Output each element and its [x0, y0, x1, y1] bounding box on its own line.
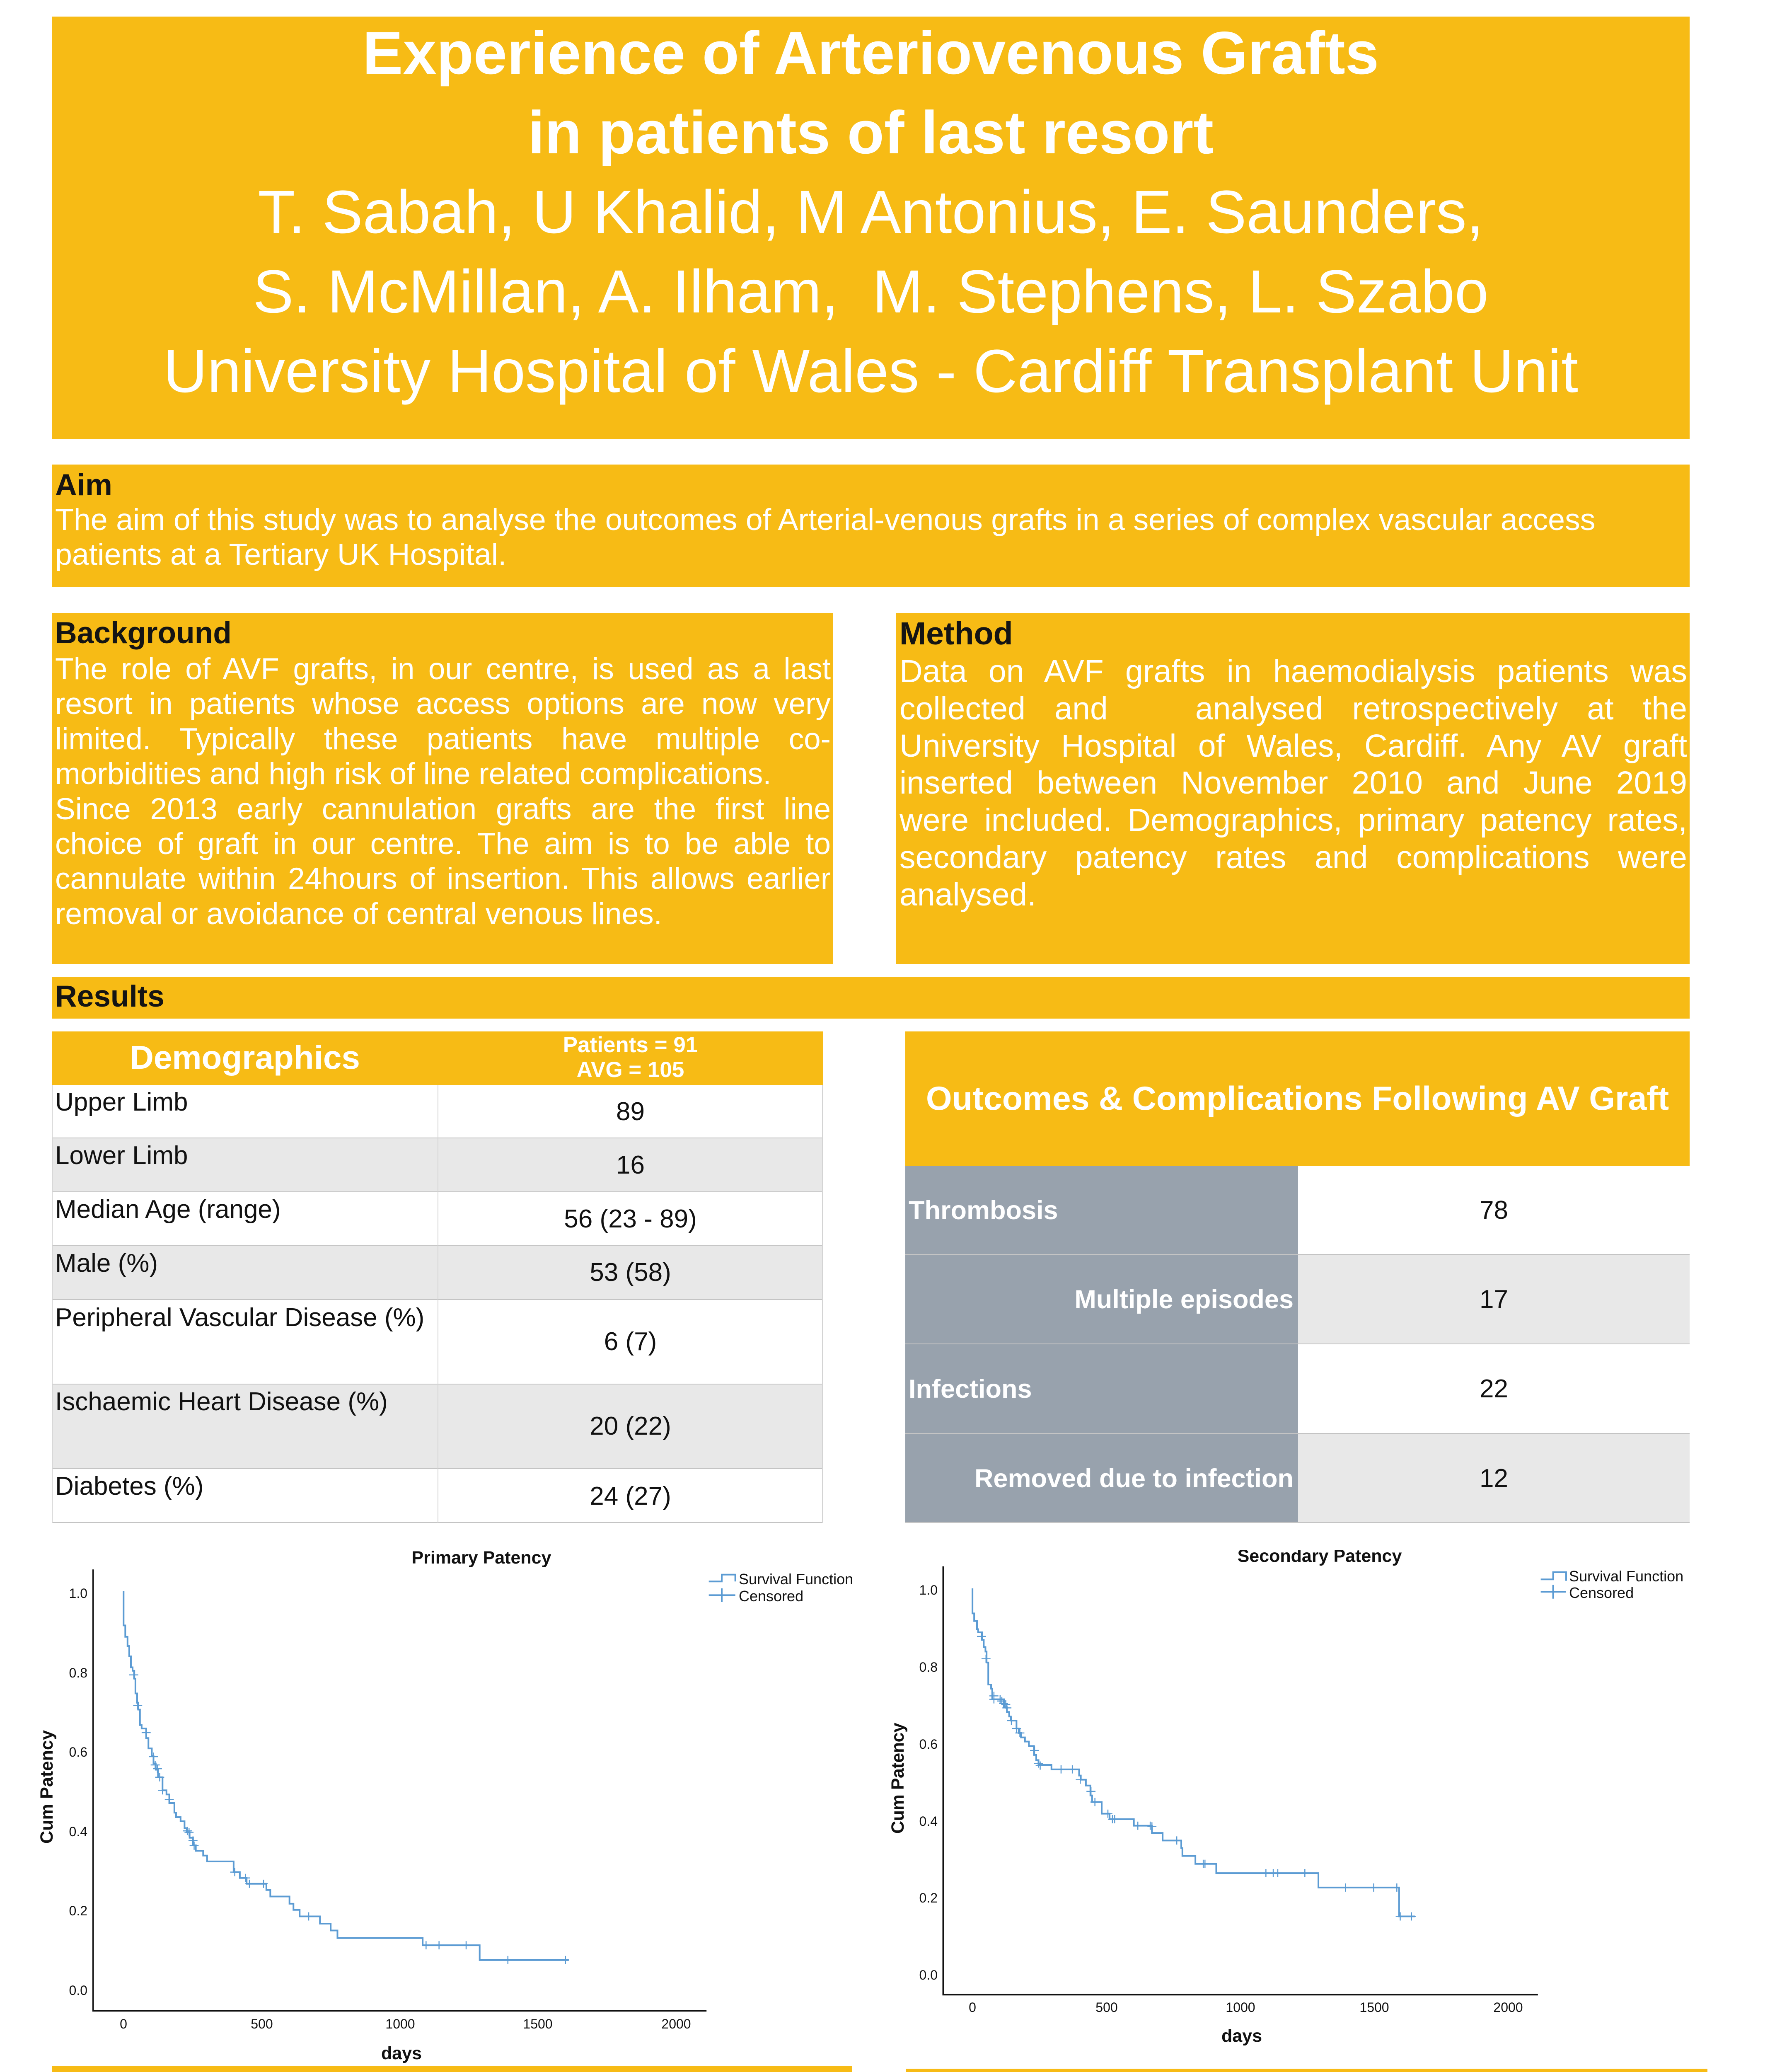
x axis labels: 500 — [251, 2016, 273, 2031]
title: in patients of last resort — [528, 99, 1214, 166]
legend: Censored — [1569, 1584, 1634, 1601]
x axis labels: 0 — [969, 2000, 976, 2015]
y axis labels: 0.8 — [919, 1660, 938, 1675]
y axis labels: 0.8 — [69, 1665, 87, 1680]
chart: secondary patency — [885, 1550, 1770, 2066]
axes and survival curve — [93, 1569, 706, 2011]
row: upper limb: 89 — [616, 1097, 645, 1126]
row: infections — [905, 1344, 1690, 1434]
title: Experience of Arteriovenous Grafts — [363, 19, 1379, 87]
text: method: were included. Demographics, primary patency rates, — [900, 802, 1687, 838]
y axis title: Cum Patency — [37, 1730, 57, 1844]
callout: primary patency summary — [52, 2066, 852, 2072]
legend: Survival Function — [1569, 1568, 1683, 1585]
table: demographics — [52, 1031, 823, 1523]
authors and institution: University Hospital of Wales - Cardiff Transplant Unit — [163, 337, 1578, 405]
row: multiple episodes: 17 — [1480, 1285, 1508, 1314]
y axis title: Cum Patency — [888, 1723, 908, 1834]
x axis labels: 1500 — [523, 2016, 553, 2031]
table header: outcomes — [905, 1031, 1690, 1166]
row: peripheral vascular disease — [52, 1300, 823, 1385]
x axis labels: 2000 — [661, 2016, 691, 2031]
row: peripheral vascular disease: 6 (7) — [604, 1327, 657, 1356]
text: background: The role of AVF grafts, in our centre, is used as a last — [55, 652, 831, 686]
label: infections: Infections — [909, 1375, 1032, 1404]
panel: background — [52, 613, 833, 964]
text: method — [900, 653, 1687, 914]
text: method: Data on AVF grafts in haemodialysis patients was — [900, 654, 1687, 689]
row: ischaemic heart disease: Ischaemic Heart Disease (%) — [55, 1387, 388, 1416]
y axis labels — [919, 1583, 938, 1982]
row: multiple episodes — [905, 1255, 1690, 1344]
text: background: removal or avoidance of central venous lines. — [55, 897, 662, 931]
text: method: secondary patency rates and complications were — [900, 840, 1687, 875]
y axis labels: 0.2 — [919, 1890, 938, 1905]
x axis labels: 0 — [120, 2016, 127, 2031]
y axis labels: 0.6 — [69, 1745, 87, 1760]
legend: Censored — [739, 1588, 803, 1605]
y axis labels: 0.2 — [69, 1903, 87, 1918]
row: median age: Median Age (range) — [55, 1195, 281, 1224]
label: removed due to infection — [905, 1434, 1298, 1523]
legend — [1541, 1568, 1683, 1601]
row: diabetes: 24 (27) — [590, 1482, 671, 1510]
table: outcomes and complications — [905, 1031, 1690, 1523]
callout: secondary patency summary — [906, 2069, 1707, 2072]
legend: Survival Function — [739, 1571, 853, 1588]
y axis labels: 1.0 — [919, 1583, 938, 1598]
header counts — [438, 1033, 823, 1082]
y axis labels: 0.4 — [69, 1824, 87, 1839]
label: removed due to infection: Removed due to infection — [974, 1464, 1294, 1493]
row: lower limb: Lower Limb — [55, 1141, 188, 1170]
legend — [709, 1571, 853, 1605]
text: method: University Hospital of Wales, Cardiff. Any AV graft — [900, 728, 1687, 764]
panel: title — [52, 17, 1690, 439]
row: male: 53 (58) — [590, 1258, 671, 1287]
y axis labels: 0.0 — [919, 1968, 938, 1982]
row: upper limb — [52, 1085, 823, 1138]
row: removed due to infection — [905, 1434, 1690, 1523]
text: method: inserted between November 2010 and June 2019 — [900, 765, 1687, 801]
y axis labels: 0.0 — [69, 1983, 87, 1998]
row: lower limb — [52, 1138, 823, 1192]
table header: outcomes: Outcomes & Complications Following AV Graft — [926, 1080, 1669, 1117]
y axis labels: 0.6 — [919, 1737, 938, 1752]
text: background: morbidities and high risk of line related complications. — [55, 757, 771, 791]
text: background: cannulate within 24hours of insertion. This allows earlier — [55, 862, 831, 896]
y axis labels: 0.4 — [919, 1814, 938, 1829]
header label: Demographics — [130, 1039, 360, 1076]
x axis labels: 1000 — [1226, 2000, 1255, 2015]
row: peripheral vascular disease: Peripheral Vascular Disease (%) — [55, 1303, 424, 1332]
label: multiple episodes — [905, 1255, 1298, 1344]
text: background — [55, 652, 831, 932]
row: diabetes: Diabetes (%) — [55, 1472, 203, 1501]
chart: primary patency — [0, 1550, 885, 2066]
y axis labels — [69, 1586, 87, 1998]
authors and institution — [52, 172, 1690, 411]
x axis labels — [969, 2000, 1523, 2015]
heading: aim: Aim — [55, 468, 112, 502]
text: background: choice of graft in our centre. The aim is to be able to — [55, 827, 831, 861]
text: aim — [55, 502, 1596, 572]
label: thrombosis — [905, 1166, 1298, 1255]
row: infections: 22 — [1480, 1375, 1508, 1403]
panel: results heading bar — [52, 977, 1690, 1019]
text: method: analysed. — [900, 877, 1036, 913]
text: background: Since 2013 early cannulation grafts are the first line — [55, 792, 831, 826]
x axis labels: 1500 — [1359, 2000, 1389, 2015]
panel: aim — [52, 465, 1690, 587]
header counts: Patients = 91 — [563, 1033, 698, 1057]
x axis labels: 1000 — [385, 2016, 415, 2031]
row: removed due to infection: 12 — [1480, 1464, 1508, 1493]
row: upper limb: Upper Limb — [55, 1088, 188, 1116]
authors and institution: T. Sabah, U Khalid, M Antonius, E. Saunders, — [258, 178, 1484, 246]
header counts: AVG = 105 — [577, 1058, 684, 1082]
row: ischaemic heart disease — [52, 1385, 823, 1469]
text: aim: The aim of this study was to analyse the outcomes of Arterial-venous grafts in a series of complex vascular access — [55, 502, 1596, 537]
axes and survival curve — [943, 1566, 1538, 1995]
x axis labels: 500 — [1095, 2000, 1118, 2015]
row: thrombosis — [905, 1166, 1690, 1255]
text: background: limited. Typically these patients have multiple co- — [55, 722, 831, 756]
row: median age — [52, 1192, 823, 1246]
text: method: collected and analysed retrospectively at the — [900, 691, 1687, 726]
label: thrombosis: Thrombosis — [909, 1196, 1058, 1225]
row: median age: 56 (23 - 89) — [564, 1205, 697, 1233]
x axis labels: 2000 — [1493, 2000, 1523, 2015]
panel: method — [896, 613, 1690, 964]
label: infections — [905, 1344, 1298, 1434]
title — [52, 13, 1690, 172]
label: multiple episodes: Multiple episodes — [1074, 1285, 1294, 1314]
x axis labels — [120, 2016, 691, 2031]
x axis title: days — [1221, 2026, 1262, 2046]
x axis title: days — [381, 2043, 422, 2063]
authors and institution: S. McMillan, A. Ilham, M. Stephens, L. Szabo — [253, 258, 1489, 326]
heading: background: Background — [55, 616, 232, 650]
row: ischaemic heart disease: 20 (22) — [590, 1412, 671, 1440]
heading: results: Results — [55, 980, 164, 1013]
text: aim: patients at a Tertiary UK Hospital. — [55, 537, 506, 571]
text: background: resort in patients whose access options are now very — [55, 687, 831, 721]
row: lower limb: 16 — [616, 1151, 645, 1179]
table header: demographics — [52, 1031, 823, 1085]
row: thrombosis: 78 — [1480, 1196, 1508, 1225]
row: male — [52, 1246, 823, 1300]
row: male: Male (%) — [55, 1249, 158, 1278]
row: diabetes — [52, 1469, 823, 1523]
y axis labels: 1.0 — [69, 1586, 87, 1601]
heading: method: Method — [900, 616, 1013, 651]
